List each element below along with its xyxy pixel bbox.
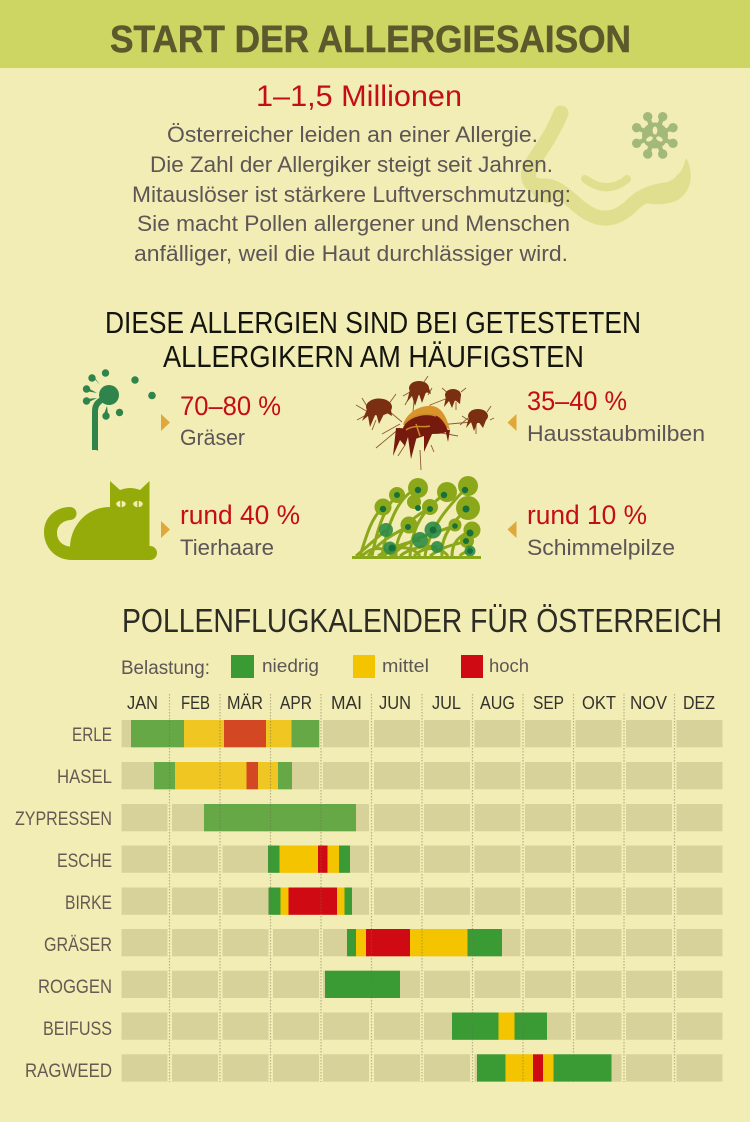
month labels: DEZ	[683, 693, 715, 713]
heading: allergies	[105, 305, 641, 374]
row: ROGGEN	[38, 971, 400, 998]
stat: grasses: Gräser	[180, 425, 245, 450]
month labels: MAI	[331, 693, 362, 713]
stat: grasses	[180, 391, 281, 450]
row: RAGWEED: RAGWEED	[25, 1061, 112, 1082]
icon: pollen grain	[632, 112, 678, 159]
intro text block: Sie macht Pollen allergener und Menschen	[137, 211, 570, 236]
month labels: AUG	[480, 693, 515, 713]
stat: mould: rund 10 %	[527, 500, 647, 530]
stat: pet hair	[180, 500, 300, 560]
row: HASEL: HASEL	[57, 767, 112, 788]
row: ESCHE: ESCHE	[57, 851, 112, 872]
stat: dust mites: Hausstaubmilben	[527, 421, 705, 446]
intro text block: Die Zahl der Allergiker steigt seit Jahren.	[150, 152, 553, 177]
arrow: grasses	[161, 414, 170, 431]
stat: dust mites: 35–40 %	[527, 386, 627, 416]
legend	[121, 655, 529, 679]
title banner: START DER ALLERGIESAISON	[110, 19, 631, 61]
row: ROGGEN: ROGGEN	[38, 977, 112, 998]
row: BIRKE	[65, 888, 352, 915]
stat: pet hair: rund 40 %	[180, 500, 300, 530]
row: ZYPRESSEN	[15, 804, 356, 831]
row: BIRKE: BIRKE	[65, 893, 112, 914]
stat: dust mites	[527, 386, 705, 446]
stat: grasses: 70–80 %	[180, 391, 281, 421]
heading: allergies: ALLERGIKERN AM HÄUFIGSTEN	[163, 339, 584, 374]
heading: allergies: DIESE ALLERGIEN SIND BEI GETESTETEN	[105, 305, 641, 340]
legend: niedrig	[262, 656, 319, 676]
month labels: SEP	[533, 693, 564, 713]
month labels: NOV	[630, 693, 667, 713]
month labels: OKT	[582, 693, 616, 713]
intro text block: anfälliger, weil die Haut durchlässiger wird.	[134, 241, 568, 266]
row: BEIFUSS	[43, 1012, 547, 1040]
row: GRÄSER	[44, 929, 502, 956]
arrow: dust mites	[508, 414, 516, 431]
row: RAGWEED	[25, 1054, 612, 1082]
legend: Belastung:	[121, 658, 210, 679]
icon: dust mites	[356, 376, 494, 470]
icon: grass dandelion	[83, 369, 156, 451]
legend: hoch	[489, 656, 529, 676]
row: ERLE	[72, 720, 319, 747]
legend: mittel	[382, 656, 429, 676]
intro text block: Mitauslöser ist stärkere Luftverschmutzung:	[132, 182, 571, 207]
month labels	[127, 693, 715, 713]
stat: pet hair: Tierhaare	[180, 535, 274, 560]
title banner	[0, 0, 750, 68]
month labels: JUL	[432, 693, 461, 713]
month labels: APR	[280, 693, 312, 713]
month labels: MÄR	[227, 693, 263, 713]
intro text block: Österreicher leiden an einer Allergie.	[167, 122, 538, 147]
icon: mould	[352, 476, 481, 559]
arrow: mould	[508, 521, 516, 538]
intro text block	[132, 122, 571, 266]
row: ZYPRESSEN: ZYPRESSEN	[15, 809, 112, 830]
stat: mould	[527, 500, 675, 560]
month labels: JAN	[127, 693, 158, 713]
icon: faded nose and mouth decoration	[529, 113, 691, 218]
arrow: pet hair	[161, 521, 170, 538]
headline figure: 1–1,5 Millionen	[256, 80, 462, 113]
stat: mould: Schimmelpilze	[527, 535, 675, 560]
calendar background grid	[122, 720, 722, 1082]
row: ERLE: ERLE	[72, 725, 112, 746]
row: HASEL	[57, 762, 292, 789]
month labels: JUN	[379, 693, 411, 713]
icon: cat	[44, 481, 157, 560]
month labels: FEB	[181, 693, 210, 713]
row: ESCHE	[57, 846, 350, 873]
row: GRÄSER: GRÄSER	[44, 935, 112, 956]
row: BEIFUSS: BEIFUSS	[43, 1019, 112, 1040]
